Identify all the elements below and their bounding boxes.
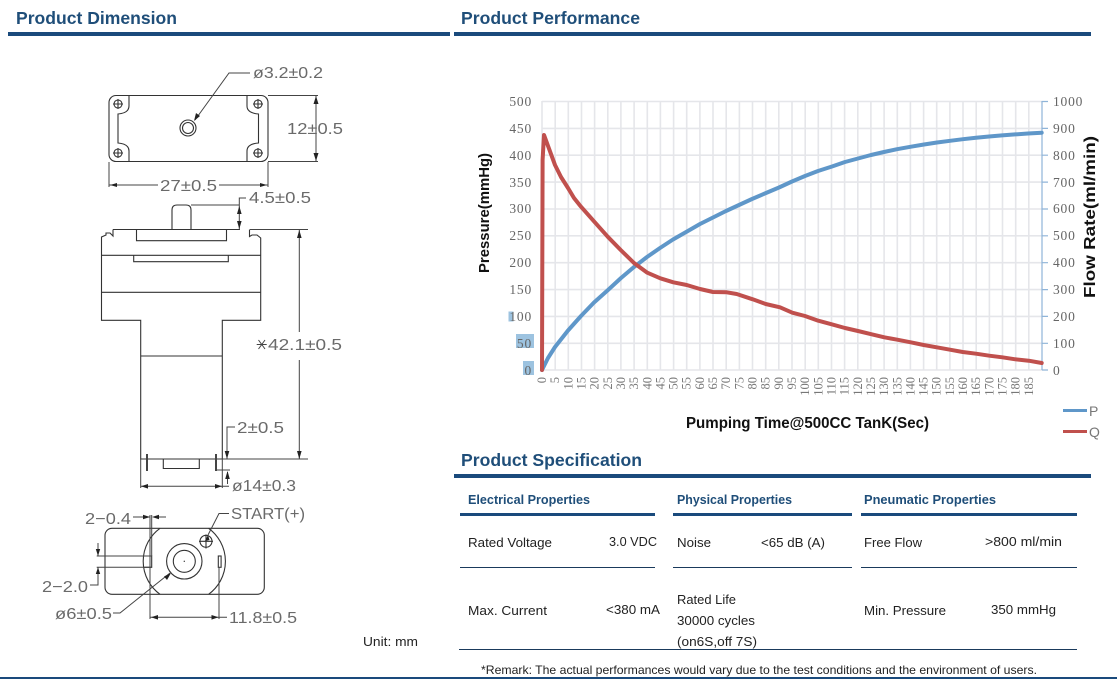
x axis labels: 80 [746,377,760,390]
x axis labels: 185 [1022,377,1036,396]
heading: Product Specification: Product Specification [461,450,642,470]
x axis labels: 180 [1009,377,1023,396]
right axis labels [1053,94,1083,378]
x axis labels: 75 [732,377,746,390]
right axis labels: 200 [1053,309,1076,324]
drawing: bottom view: 2−0.4 [85,511,131,528]
heading: Product Specification [454,450,1091,478]
x axis labels: 65 [706,377,720,390]
legend: Q [1089,424,1100,440]
x axis labels: 90 [772,377,786,390]
right axis labels: 1000 [1053,94,1083,109]
line: P curve [542,133,1042,370]
x axis labels: 55 [680,377,694,390]
x axis labels: 150 [930,377,944,396]
drawing: top view: 12±0.5 [287,121,343,138]
right axis labels: 0 [1053,363,1061,378]
panel: physical properties: <65 dB (A) [761,535,825,550]
left axis labels: 450 [509,121,532,136]
drawing: side view: 2±0.5 [237,420,284,437]
heading: Product Performance [454,8,1091,36]
footer rule [0,677,1117,679]
drawing: bottom view: 2−2.0 [42,579,88,596]
text: unit: Unit: mm [363,634,418,649]
panel: electrical properties: Rated Voltage [468,535,552,550]
x axis labels: 160 [956,377,970,396]
x axis labels: 145 [917,377,931,396]
x axis labels: 35 [627,377,641,390]
panel: pneumatic properties: Free Flow [864,535,923,550]
legend [1063,403,1100,440]
highlight marks behind left axis labels [508,312,534,375]
right axis labels: 100 [1053,336,1076,351]
right axis labels: 300 [1053,282,1076,297]
x axis labels: 45 [653,377,667,390]
left axis labels: 200 [509,255,532,270]
left axis labels: 100 [509,309,532,324]
left axis labels: 300 [509,201,532,216]
panel: pneumatic properties: 350 mmHg [991,602,1056,617]
heading: Product Dimension: Product Dimension [16,8,177,28]
x axis labels: 10 [561,377,575,390]
x axis labels: 0 [535,377,549,383]
panel: physical properties [673,492,852,649]
left axis labels: 0 [524,363,532,378]
panel: physical properties: 30000 cycles [677,613,756,628]
x axis labels: 115 [838,377,852,395]
x axis labels: 100 [798,377,812,396]
x axis labels: 135 [890,377,904,396]
x axis labels [535,377,1036,396]
panel: pneumatic properties [861,492,1077,618]
left axis labels: 500 [509,94,532,109]
x axis labels: 25 [601,377,615,390]
axis title: pressure: Pressure(mmHg) [477,153,493,273]
left axis labels: 350 [509,175,532,190]
text: remark: *Remark: The actual performances would vary due to the test conditions and the environment of users. [481,663,1037,677]
x axis labels: 110 [824,377,838,395]
heading: Product Dimension [8,8,450,36]
x axis labels: 155 [943,377,957,396]
axis title: flow rate: Flow Rate(ml/min) [1082,136,1099,298]
panel: electrical properties: Max. Current [468,603,547,618]
left axis labels: 400 [509,148,532,163]
panel: physical properties: Noise [677,535,711,550]
right axis labels: 500 [1053,228,1076,243]
x axis labels: 15 [574,377,588,390]
axis: right flow-rate axis line [1042,101,1048,370]
x axis labels: 30 [614,377,628,390]
line: Q curve [542,135,1042,370]
panel: electrical properties: <380 mA [606,602,660,617]
left axis labels: 150 [509,282,532,297]
drawing: bottom view: ø6±0.5 [55,606,112,623]
panel: electrical properties: Electrical Properties [468,492,590,507]
legend: P [1089,403,1098,419]
right axis labels: 400 [1053,255,1076,270]
x axis labels: 170 [982,377,996,396]
drawing: bottom view [42,506,305,627]
x axis labels: 50 [667,377,681,390]
drawing: side view: 4.5±0.5 [249,190,311,207]
drawing: bottom view: START(+) [231,506,305,523]
drawing: top view: 27±0.5 [160,178,217,195]
left axis labels [509,94,532,378]
panel: electrical properties: 3.0 VDC [609,534,657,549]
right axis labels: 800 [1053,148,1076,163]
drawing: top view: ø3.2±0.2 [253,65,323,82]
panel: pneumatic properties: >800 ml/min [985,534,1062,549]
x axis labels: 95 [785,377,799,390]
drawing: side view: 42.1±0.5 [268,337,342,354]
x axis labels: 140 [903,377,917,396]
x axis labels: 60 [693,377,707,390]
x axis labels: 120 [851,377,865,396]
drawing: side view [102,190,342,495]
x axis labels: 130 [877,377,891,396]
panel: physical properties: Rated Life [677,592,736,607]
x axis labels: 165 [969,377,983,396]
chart: pressure and flow rate over pumping time [508,94,1083,396]
heading: Product Performance: Product Performance [461,8,640,28]
panel: pneumatic properties: Pneumatic Properties [864,492,996,507]
axis title: pumping time: Pumping Time@500CC TanK(Sec) [686,415,929,432]
x axis labels: 125 [864,377,878,396]
table bottom rule [459,649,1077,650]
panel: pneumatic properties: Min. Pressure [864,603,946,618]
x axis labels: 85 [759,377,773,390]
x axis labels: 5 [548,377,562,383]
drawing: bottom view: 11.8±0.5 [229,610,297,627]
left axis labels: 250 [509,228,532,243]
panel: electrical properties [460,492,660,618]
right axis labels: 900 [1053,121,1076,136]
x axis labels: 175 [996,377,1010,396]
x axis labels: 20 [588,377,602,390]
left axis labels: 50 [517,336,532,351]
right axis labels: 700 [1053,175,1076,190]
x axis labels: 105 [811,377,825,396]
panel: physical properties: (on6S,off 7S) [677,634,757,649]
drawing: side view: ø14±0.3 [232,478,296,495]
drawing: top view [109,65,343,195]
x axis labels: 40 [640,377,654,390]
right axis labels: 600 [1053,201,1076,216]
panel: physical properties: Physical Properties [677,492,792,507]
x axis labels: 70 [719,377,733,390]
